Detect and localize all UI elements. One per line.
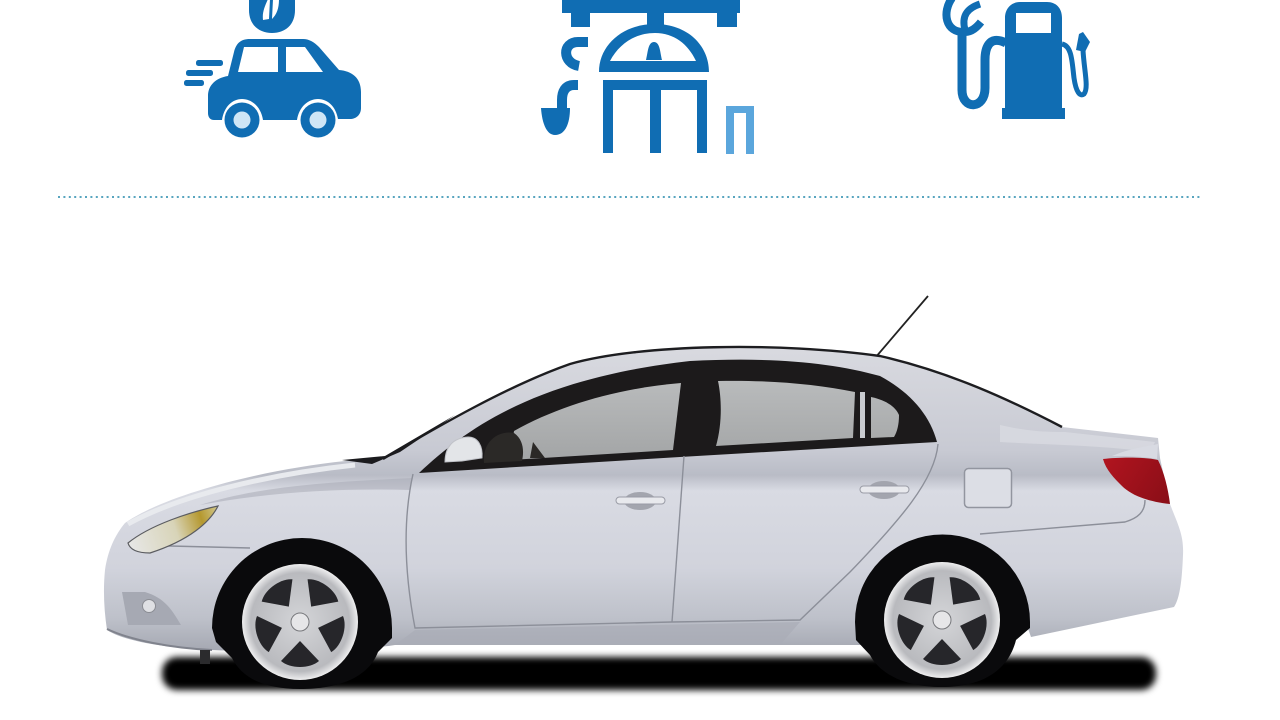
car body [104, 347, 1183, 651]
antenna [875, 296, 928, 358]
roof edge line [383, 347, 1062, 459]
dashboard silhouette [484, 433, 545, 463]
rear window glass [716, 381, 855, 446]
speed lines [184, 60, 223, 86]
tail light [1103, 444, 1170, 504]
front wheel [212, 538, 392, 689]
spoke gaps [893, 572, 991, 665]
quarter window glass [871, 397, 899, 438]
light blue small gate [726, 106, 754, 154]
fuel door [964, 468, 1012, 508]
dotted divider [58, 196, 1202, 198]
front bumper lip [107, 629, 212, 650]
spoke gaps [251, 574, 349, 667]
hood shade [200, 478, 412, 505]
door handle rear [860, 481, 909, 499]
underbody bracket [200, 650, 210, 664]
bell in dome [646, 42, 662, 60]
rear window chrome strip [860, 392, 865, 438]
rear wheel [855, 534, 1030, 687]
columns [603, 80, 707, 153]
headlight [128, 506, 218, 553]
ground shadow [162, 657, 1156, 690]
mirror [445, 437, 482, 462]
windshield dark strip [342, 415, 455, 464]
car silhouette [208, 39, 361, 120]
lower door highlight [395, 622, 800, 645]
dome [599, 24, 709, 72]
icon: fuel pump [946, 0, 1090, 119]
rear deck highlight [1000, 425, 1155, 452]
door handle front [616, 492, 665, 510]
door seams [130, 444, 1145, 628]
icon: refinery dome building [541, 0, 754, 154]
left hose [962, 32, 1006, 105]
hose crescent head [946, 0, 981, 32]
fog lamp recess [122, 592, 181, 625]
car photo: silver sedan side view [104, 296, 1183, 690]
car windows [238, 47, 323, 72]
icon: car with coin [184, 0, 361, 138]
side window frame [419, 360, 937, 473]
front window glass [510, 383, 681, 460]
pump body [1002, 2, 1065, 119]
car wheels [224, 102, 336, 138]
hood highlight [128, 465, 355, 524]
coin above the car [249, 0, 295, 33]
nozzle [1076, 32, 1090, 52]
right hose [1062, 44, 1086, 95]
hook pipe [566, 42, 588, 66]
drip pipe and cup [541, 85, 578, 135]
top beam with feet [562, 0, 740, 30]
